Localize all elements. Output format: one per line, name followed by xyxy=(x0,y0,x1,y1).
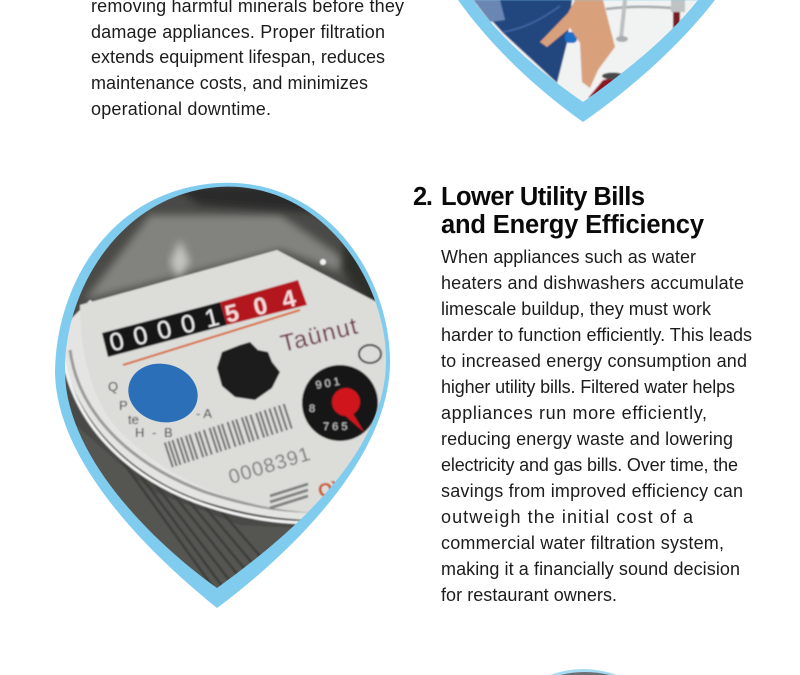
ribbed lower housing xyxy=(77,427,291,588)
text block: section 2 body: for restaurant owners. xyxy=(441,585,617,605)
blurred background machinery xyxy=(85,215,390,300)
text block: section 2 body: limescale buildup, they must work xyxy=(441,299,712,319)
text block: filtration benefit continuation xyxy=(91,0,404,119)
spec labels: P xyxy=(119,398,128,413)
text block: section 2 body: outweigh the initial cost of a xyxy=(441,507,694,527)
barcode xyxy=(165,404,292,467)
spec labels: H - B xyxy=(135,425,175,440)
water meter photo: 7 6 5 xyxy=(323,421,347,433)
text block: filtration benefit continuation: operational downtime. xyxy=(91,99,271,119)
plumber photo xyxy=(473,0,698,102)
counter band black xyxy=(102,302,227,357)
text block: section 2 body: making it a financially sound decision xyxy=(441,559,740,579)
droplet frame xyxy=(55,183,390,608)
text block: section 2 body: reducing energy waste and lowering xyxy=(441,429,733,449)
text block: section 2 body xyxy=(441,247,752,605)
spec labels: Q xyxy=(108,379,118,394)
heading: section 2: 2. xyxy=(413,183,433,211)
dial rim xyxy=(65,299,308,520)
spec labels xyxy=(108,379,212,440)
text block: section 2 body: appliances run more efficiently, xyxy=(441,403,707,423)
heading: section 2: Lower Utility Bills xyxy=(441,183,645,211)
counter band red xyxy=(220,280,307,325)
counter digits: 00001 xyxy=(107,303,222,357)
text block: filtration benefit continuation: damage appliances. Proper filtration xyxy=(91,22,385,42)
text block: filtration benefit continuation: maintenance costs, and minimizes xyxy=(91,73,368,93)
small grey stripes xyxy=(270,484,308,508)
text block: section 2 body: When appliances such as water xyxy=(441,247,696,267)
text block: section 2 body: to increased energy consumption and xyxy=(441,351,747,371)
orange mark: ОХ xyxy=(316,476,347,503)
water meter photo xyxy=(65,186,386,588)
small ring mark xyxy=(359,345,381,363)
black gear xyxy=(217,342,280,400)
text block: section 2 body: heaters and dishwashers accumulate xyxy=(441,273,744,293)
spec labels: - A xyxy=(196,406,212,421)
water meter photo: 9 0 1 xyxy=(315,376,341,392)
counter digits: 504 xyxy=(222,285,299,329)
spec labels: te xyxy=(128,412,139,427)
text block: section 2 body: savings from improved efficiency can xyxy=(441,481,743,501)
blue sticker xyxy=(128,364,198,422)
brand name: Taünut xyxy=(278,313,360,358)
text block: filtration benefit continuation: extends equipment lifespan, reduces xyxy=(91,47,385,67)
red pointer dial xyxy=(302,365,378,441)
text block: section 2 body: harder to function efficiently. This leads xyxy=(441,325,752,345)
heading: section 2 xyxy=(413,183,705,239)
image: water meter in droplet frame xyxy=(50,180,400,608)
orange rule xyxy=(123,310,300,365)
heading: section 2: and Energy Efficiency xyxy=(441,211,705,239)
dial face xyxy=(80,250,392,513)
text block: section 2 body: electricity and gas bills. Over time, the xyxy=(441,455,738,475)
text block: section 2 body: higher utility bills. Filtered water helps xyxy=(441,377,735,397)
image: top of next droplet frame xyxy=(550,669,617,675)
water meter photo: 8 xyxy=(309,403,315,415)
text block: section 2 body: commercial water filtration system, xyxy=(441,533,724,553)
serial number: 0008391 xyxy=(226,443,313,489)
counter digits xyxy=(108,288,298,352)
shield frame xyxy=(458,0,715,122)
image: plumber in shield-shaped frame xyxy=(458,0,715,122)
